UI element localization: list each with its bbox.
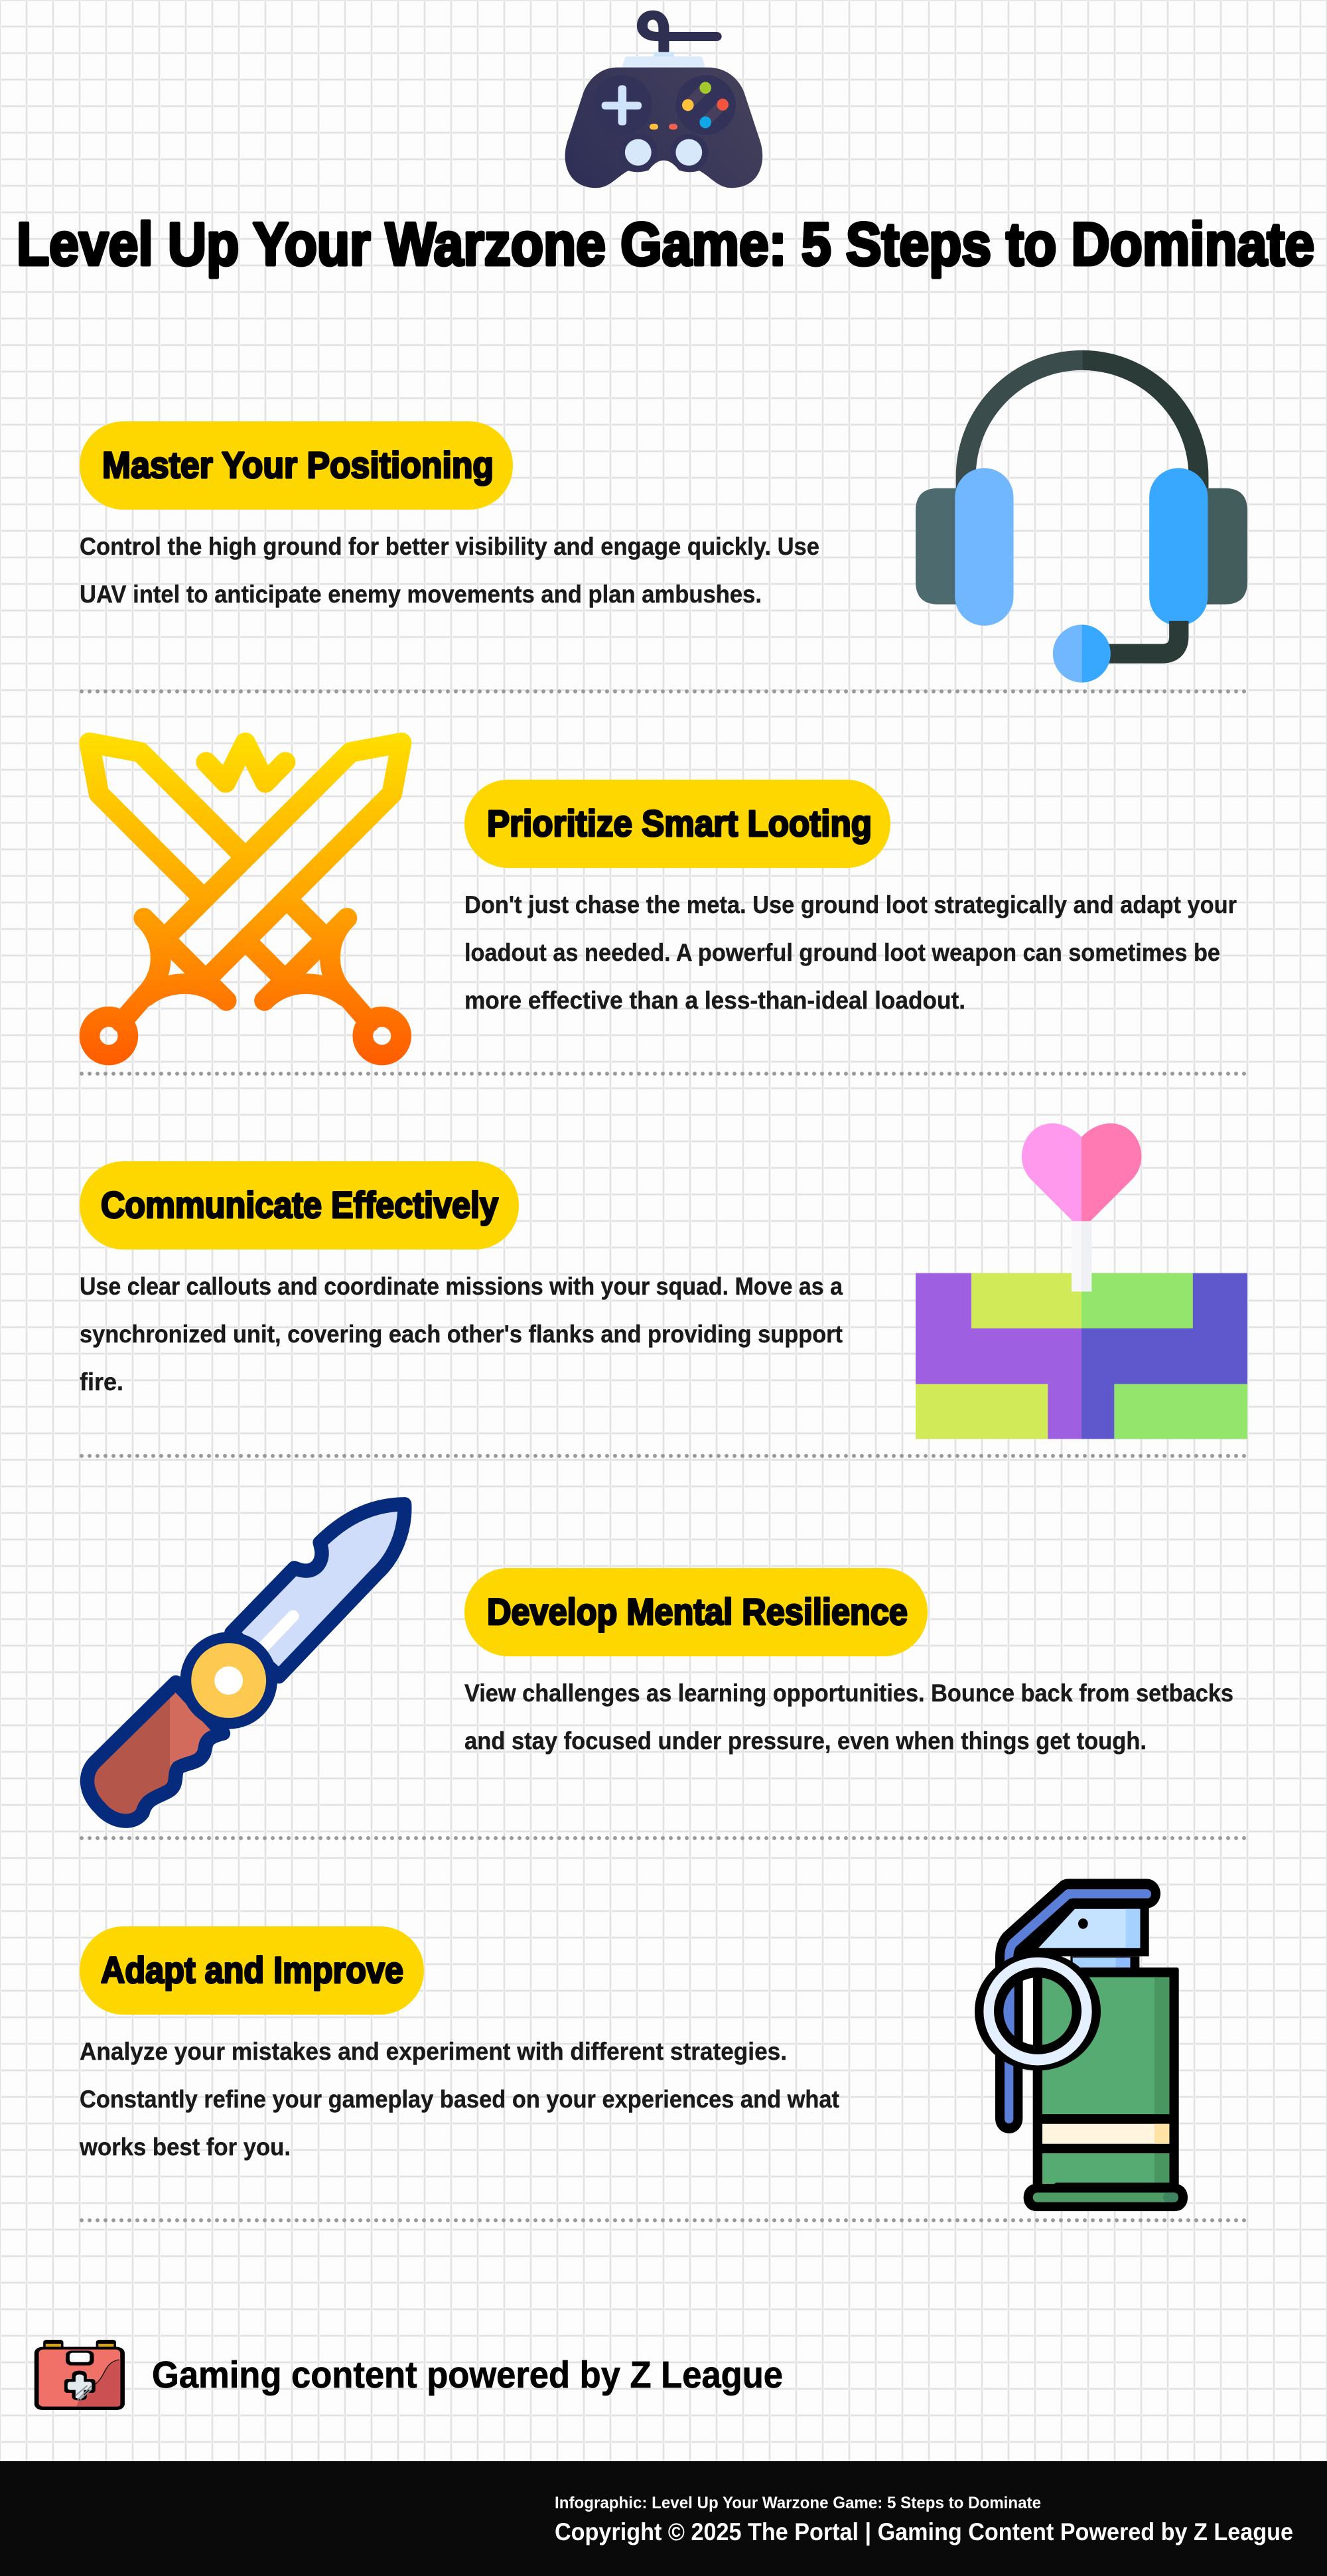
heading pill: Adapt and Improve <box>80 1926 424 2015</box>
body text: Don't just chase the meta. Use ground loot strategically and adapt your <box>464 891 1237 918</box>
icon: game controller <box>565 15 762 188</box>
powered-by text: Gaming content powered by Z League <box>152 2354 783 2396</box>
body text: works best for you. <box>79 2133 291 2161</box>
heading pill: Master Your Positioning <box>80 421 513 510</box>
body text <box>79 2038 839 2161</box>
body text: Use clear callouts and coordinate missions with your squad. Move as a <box>80 1273 843 1300</box>
body text: Constantly refine your gameplay based on your experiences and what <box>80 2086 839 2113</box>
footer caption: Infographic: Level Up Your Warzone Game: 5 Steps to Dominate <box>555 2494 1041 2512</box>
body text: Control the high ground for better visibility and engage quickly. Use <box>80 533 819 560</box>
footer bar <box>0 2461 1327 2576</box>
panel: step 4 <box>88 1504 1233 1821</box>
icon: smoke grenade <box>975 1894 1188 2211</box>
icon: headset <box>916 360 1247 683</box>
heading pill: Prioritize Smart Looting <box>464 780 890 868</box>
body text: View challenges as learning opportunities. Bounce back from setbacks <box>464 1680 1233 1707</box>
icon: first aid kit <box>35 2340 125 2410</box>
body text <box>464 891 1237 1014</box>
icon: knife <box>88 1504 405 1821</box>
body text <box>464 1680 1233 1754</box>
panel: step 1 <box>80 360 1247 683</box>
heading pill: Communicate Effectively <box>80 1161 519 1250</box>
body text: fire. <box>80 1368 123 1395</box>
body text: Analyze your mistakes and experiment with different strategies. <box>80 2038 787 2065</box>
panel: step 3 <box>80 1123 1247 1439</box>
body text: and stay focused under pressure, even when things get tough. <box>464 1727 1147 1754</box>
icon: heart on block maze <box>916 1123 1247 1439</box>
heading pill: Prioritize Smart Looting: Prioritize Smart Looting <box>487 802 872 844</box>
heading pill: Master Your Positioning: Master Your Positioning <box>102 444 494 486</box>
body text: synchronized unit, covering each other's flanks and providing support <box>80 1321 843 1348</box>
icon: crossed swords <box>90 743 401 1055</box>
body text <box>80 1273 843 1395</box>
heading pill: Communicate Effectively: Communicate Effectively <box>101 1184 498 1226</box>
body text <box>80 533 819 608</box>
panel: step 2 <box>90 743 1237 1055</box>
heading pill: Develop Mental Resilience: Develop Mental Resilience <box>487 1591 908 1632</box>
body text: loadout as needed. A powerful ground loot weapon can sometimes be <box>464 939 1220 966</box>
body text: more effective than a less-than-ideal loadout. <box>464 987 965 1014</box>
body text: UAV intel to anticipate enemy movements and plan ambushes. <box>80 581 762 608</box>
heading pill: Develop Mental Resilience <box>464 1568 928 1656</box>
sponsor row <box>35 2340 783 2410</box>
panel: step 5 <box>79 1894 1188 2211</box>
heading pill: Adapt and Improve: Adapt and Improve <box>101 1949 403 1991</box>
